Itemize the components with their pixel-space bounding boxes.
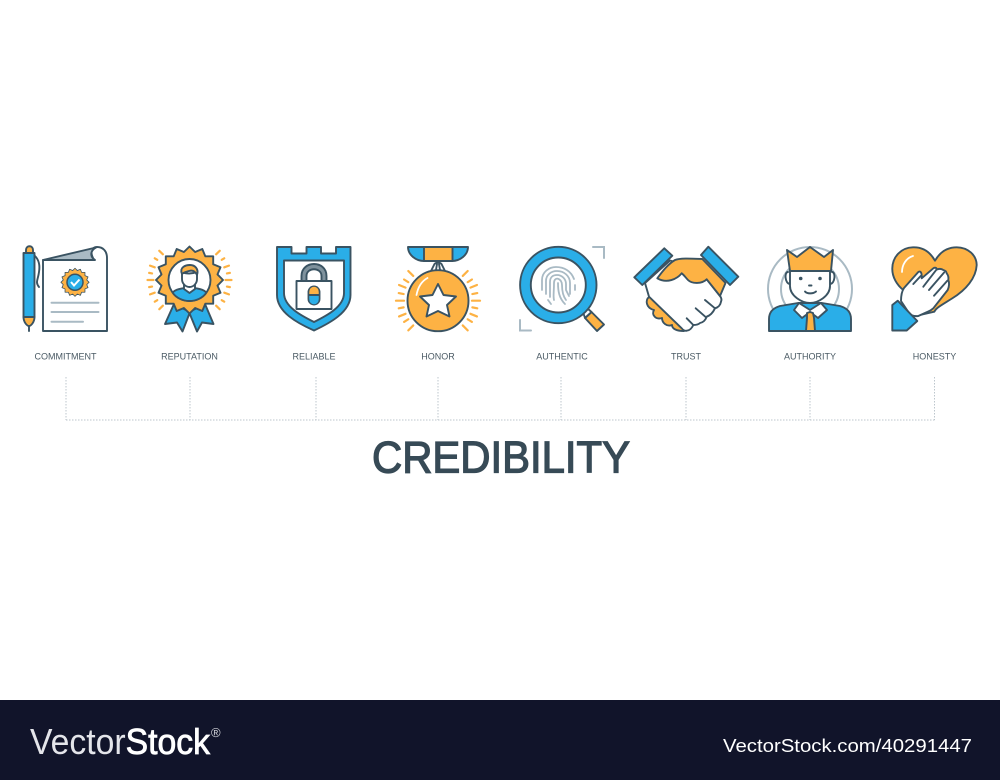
footer image id: VectorStock.com/40291447 <box>723 736 972 756</box>
footer logo: VectorStock <box>30 721 211 762</box>
footer bar <box>0 700 1000 780</box>
label: commitment: COMMITMENT <box>34 351 97 361</box>
title: CREDIBILITY <box>372 434 630 483</box>
label: authority: AUTHORITY <box>784 351 836 361</box>
label: reputation: REPUTATION <box>161 351 218 361</box>
icon: authority crowned man <box>768 247 852 331</box>
icon: trust handshake <box>634 247 738 331</box>
connector: dotted bracket <box>66 377 934 420</box>
label: honor: HONOR <box>421 351 455 361</box>
icon: authentic magnifier and fingerprint <box>520 247 604 331</box>
icon: honor medal <box>396 247 480 331</box>
icon: reputation badge <box>148 246 232 332</box>
label: authentic: AUTHENTIC <box>536 351 588 361</box>
label: reliable: RELIABLE <box>292 351 336 361</box>
icon: commitment pen and document <box>24 246 107 331</box>
label: trust: TRUST <box>671 351 701 361</box>
icon: honesty hand on heart <box>892 247 977 330</box>
footer registered mark: ® <box>211 725 221 740</box>
icon: reliable shield with padlock <box>277 247 350 330</box>
label: honesty: HONESTY <box>913 351 956 361</box>
